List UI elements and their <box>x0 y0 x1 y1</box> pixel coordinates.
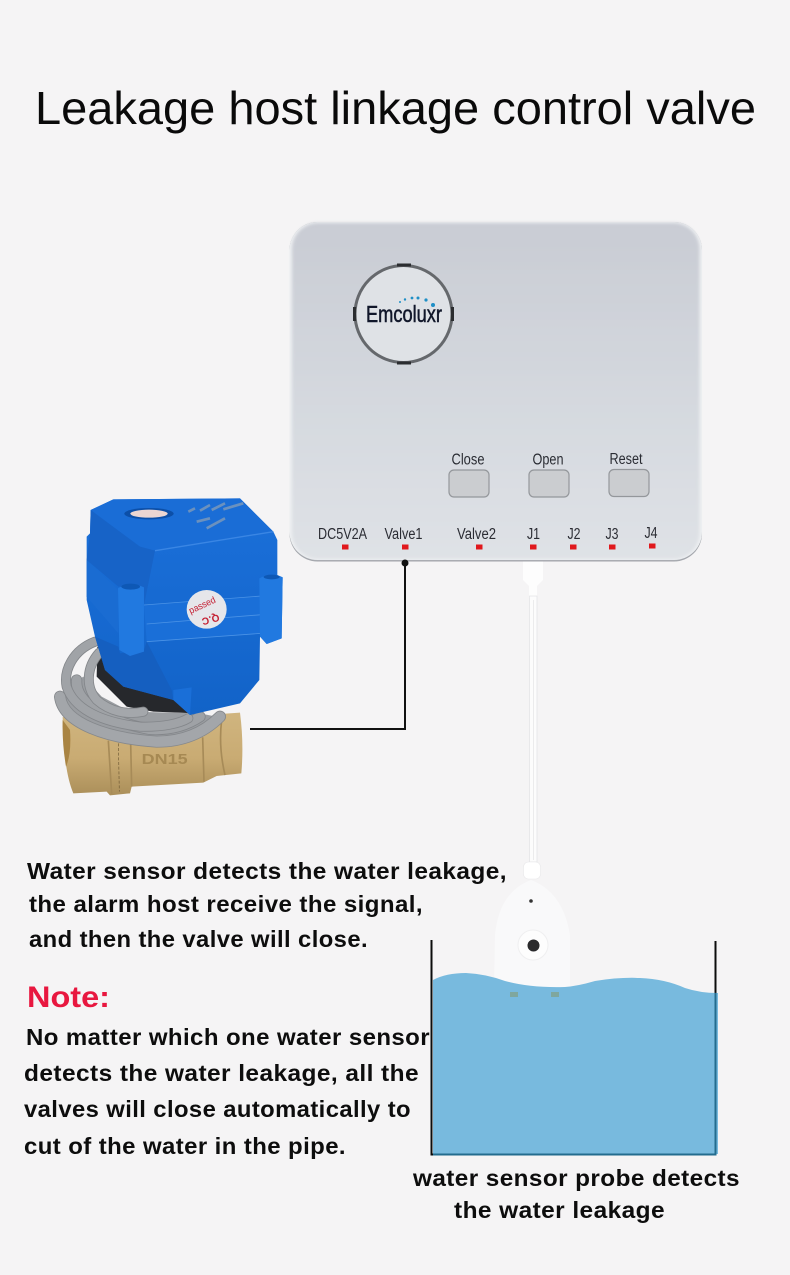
port labels: DC5V2A <box>318 526 368 543</box>
actuator top face <box>91 498 273 551</box>
motorized ball valve <box>60 498 283 795</box>
cable mass <box>63 677 220 741</box>
probe caption: the water leakage <box>454 1197 665 1223</box>
grey cable coil <box>60 642 220 742</box>
note heading: Note: <box>27 981 110 1014</box>
port labels: J3 <box>606 526 618 543</box>
description text: and then the valve will close. <box>29 926 368 952</box>
cable: host to sensor <box>523 561 543 862</box>
QC passed sticker: Q.C <box>200 611 220 626</box>
buttons <box>449 451 649 497</box>
stem nut <box>97 647 197 713</box>
actuator silhouette <box>87 498 283 715</box>
note text: detects the water leakage, all the <box>24 1060 419 1086</box>
brass body: DN15 <box>142 752 188 768</box>
wire plug on host <box>402 560 408 566</box>
connector wire: host to valve <box>250 562 405 729</box>
logo: Emcoluxr <box>366 301 442 327</box>
QC passed sticker: passed <box>187 595 217 616</box>
indicator window <box>124 508 174 519</box>
host body <box>290 222 702 562</box>
water container <box>432 940 718 1154</box>
note text: cut of the water in the pipe. <box>24 1133 346 1159</box>
buttons: Close <box>452 452 484 468</box>
title: Leakage host linkage control valve <box>35 82 756 134</box>
note text: No matter which one water sensor <box>26 1024 430 1050</box>
brass body <box>63 713 242 795</box>
QC passed sticker <box>187 590 227 629</box>
description text: the alarm host receive the signal, <box>29 891 423 917</box>
buttons: Open <box>532 452 564 468</box>
port labels <box>318 525 658 543</box>
lower housing shading <box>95 637 173 700</box>
container walls <box>432 940 716 1154</box>
port labels: Valve2 <box>457 526 496 543</box>
probe caption: water sensor probe detects <box>412 1165 740 1191</box>
water <box>433 973 718 1154</box>
clamp band <box>144 596 262 642</box>
alarm host panel <box>290 222 702 562</box>
buttons: Reset <box>610 451 643 468</box>
actuator left face <box>87 510 155 605</box>
description text: Water sensor detects the water leakage, <box>27 858 507 884</box>
port labels: J1 <box>527 526 540 543</box>
port labels: J4 <box>644 525 658 542</box>
screw posts <box>118 584 144 656</box>
water sensor probe <box>494 862 570 990</box>
description text <box>27 858 507 952</box>
port LEDs <box>342 544 656 550</box>
sensor pins <box>510 992 518 997</box>
logo <box>354 265 452 363</box>
note text: valves will close automatically to <box>24 1096 411 1122</box>
probe caption <box>412 1165 740 1223</box>
port labels: Valve1 <box>384 526 422 543</box>
port labels: J2 <box>568 526 580 543</box>
note text <box>24 1024 430 1159</box>
spec print <box>188 503 243 528</box>
